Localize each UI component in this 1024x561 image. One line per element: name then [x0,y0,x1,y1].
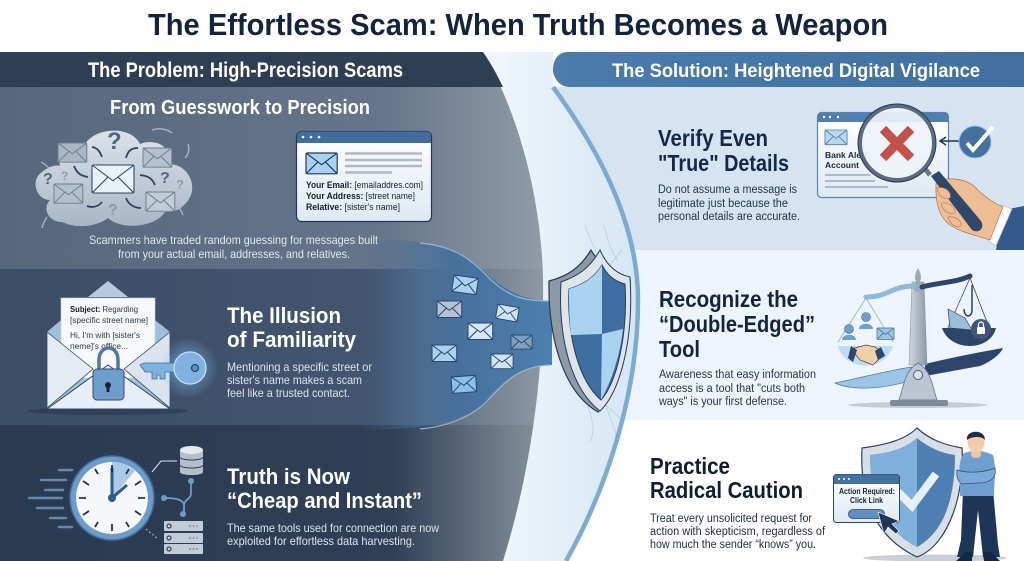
icon: personalised email card [296,132,432,222]
text block: illusion of familiarity: Mentioning a specific street or [227,360,372,374]
letter text: neme]'s office... [70,341,128,351]
card text [306,180,423,213]
question marks [43,128,184,219]
text block: verify even true details [658,125,800,223]
text: guesswork caption: Scammers have traded random guessing for messages built [89,233,379,247]
text block: illusion of familiarity: sister's name makes a scam [227,373,362,387]
icon: central shield [549,250,631,412]
text block: verify even true details: Do not assume a message is [658,184,797,196]
connectors [152,461,177,472]
text block: verify even true details: Verify Even [658,125,768,151]
letter [61,298,155,378]
text block: verify even true details: "True" Details [658,150,789,176]
question marks: ? [61,169,68,183]
icon: shield, phishing popup and person: Action Required: [839,487,895,496]
padlock [99,348,118,371]
blue arc ring [553,87,638,561]
pole and base [909,282,927,365]
guessed envelopes [54,143,175,211]
heading: from guesswork to precision: From Guesswork to Precision [110,97,370,119]
icon: magnifier inspecting fake bank alert: Bank Alert: [825,150,870,160]
text block: truth is now cheap and instant: Truth is Now [227,464,351,489]
clock [70,456,154,540]
left pan with connection symbols [838,298,893,342]
right pan with hook and lock [947,278,990,330]
hand back [936,179,1003,240]
letter text [70,304,148,351]
key [158,338,218,398]
icon: cloud of guessed emails [36,128,192,228]
icon: magnifier inspecting fake bank alert [818,104,1024,250]
funnel stream [360,240,552,430]
text block: illusion of familiarity: of Familiarity [227,327,357,352]
header: solution: The Solution: Heightened Digital Vigilance [612,61,980,82]
fingers [937,188,961,227]
central envelope [92,165,134,193]
arrows [74,147,155,208]
text block: truth is now cheap and instant: “Cheap and Instant” [227,488,422,513]
servers [164,521,203,554]
check badge [940,137,970,145]
question marks: ? [43,171,53,188]
text block: illusion of familiarity: The Illusion [227,303,341,328]
card text: Relative: [sister's name] [306,202,400,213]
text block: recognize the double-edged tool [658,286,816,408]
letter text: [specific street name] [70,315,148,325]
envelopes in stream [432,275,532,393]
text block: truth is now cheap and instant: The same tools used for connection are now [227,521,439,535]
card text: Your Email: [emailaddres.com] [306,180,423,191]
text block: practice radical caution: Radical Caution [650,477,803,503]
large shield [862,428,962,557]
icon: shield, phishing popup and person: Click Link [850,496,884,505]
beam [866,286,914,297]
icon: clock with data network [29,446,203,554]
popup [834,474,900,522]
text block: illusion of familiarity [227,303,372,400]
header: problem: The Problem: High-Precision Scams [88,59,403,82]
handle [931,171,982,231]
text block: practice radical caution [650,453,826,551]
question marks: ? [108,202,118,219]
text block: recognize the double-edged tool: Recognize the [659,286,798,312]
text block: practice radical caution: Treat every unsolicited request for [650,513,812,525]
letter text: Hi, I'm with [sister's [70,330,140,340]
lens [860,106,934,180]
letter text: Subject: Regarding [70,304,138,314]
globe mesh lines [585,225,622,442]
question marks: ? [107,128,122,155]
icon: shield, phishing popup and person [834,428,1007,561]
question marks: ? [160,170,170,187]
text block: truth is now cheap and instant [227,464,439,548]
text block: practice radical caution: action with skepticism, regardless of [650,526,826,538]
text block: illusion of familiarity: feel like a trusted contact. [227,386,350,400]
sleeve [996,206,1024,250]
text block: truth is now cheap and instant: exploited for effortless data harvesting. [227,534,415,548]
card text: Your Address: [street name] [306,191,415,202]
text block: recognize the double-edged tool: “Double-Edged” [659,311,815,337]
cursor [878,512,899,534]
icon: balance scale [835,268,1003,408]
panel: problem backgrounds [0,87,545,561]
title: The Effortless Scam: When Truth Becomes a Weapon [148,7,888,42]
text block: recognize the double-edged tool: access is a tool that "cuts both [659,383,805,395]
header: problem [0,52,503,87]
database [180,450,203,475]
icon: magnifier inspecting fake bank alert: Account [825,160,859,170]
handshake [851,345,884,365]
panel: centre divider area [470,52,638,561]
speed lines [29,470,72,527]
text: guesswork caption [89,233,379,261]
text block: recognize the double-edged tool: Tool [659,336,700,362]
text block: recognize the double-edged tool: ways" is your first defense. [658,396,787,408]
blade [835,367,915,388]
panel: solution backgrounds [556,87,1024,420]
funnel of envelopes [360,240,552,430]
question marks: ? [176,177,184,192]
icon: envelope with padlock and key [28,281,218,415]
text block: practice radical caution: Practice [650,453,730,479]
text: guesswork caption: from your actual email, addresses, and relatives. [118,247,350,261]
text block: verify even true details: legitimate just because the [658,198,788,210]
text block: recognize the double-edged tool: Awareness that easy information [659,369,816,381]
header: solution [553,52,1024,87]
person [957,490,1000,557]
text block: verify even true details: personal details are accurate. [658,211,800,223]
text block: practice radical caution: how much the sender “knows” you. [650,539,816,551]
